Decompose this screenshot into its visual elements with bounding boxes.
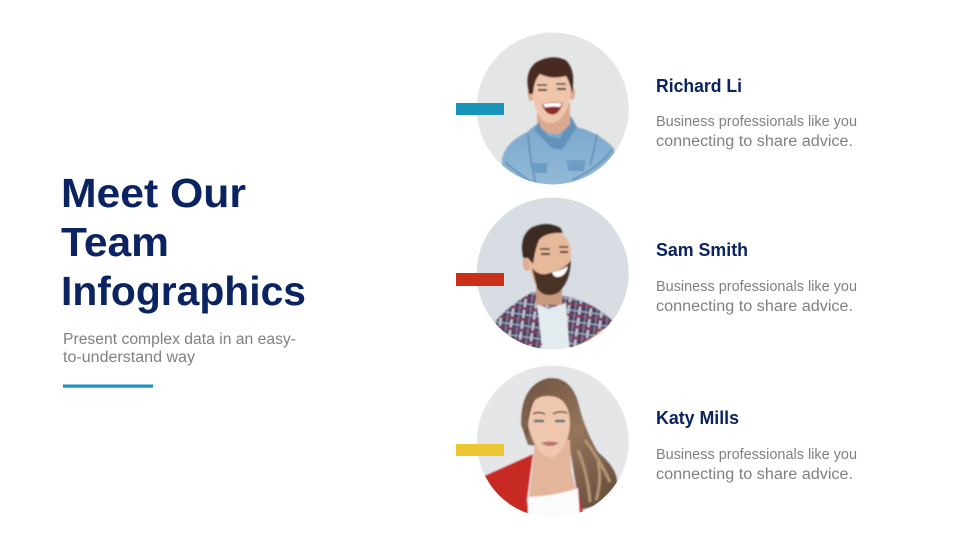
title: Meet Our <box>61 170 246 216</box>
description: Katy Mills: Business professionals like you <box>656 446 857 463</box>
accent bar: blue <box>456 103 504 115</box>
accent bar: yellow <box>456 444 504 456</box>
description: Richard Li: connecting to share advice. <box>656 133 853 150</box>
description: Sam Smith: Business professionals like you <box>656 278 857 295</box>
name: Richard Li: Richard Li <box>656 75 742 96</box>
accent bar: red <box>456 273 504 286</box>
description: Richard Li <box>656 113 857 150</box>
subtitle: Present complex data in an easy- <box>63 331 296 348</box>
portrait: Katy Mills <box>476 366 629 514</box>
title <box>61 170 306 314</box>
description: Katy Mills: connecting to share advice. <box>656 466 853 483</box>
portrait: Richard Li <box>477 32 629 184</box>
description: Sam Smith <box>656 278 857 315</box>
name: Sam Smith: Sam Smith <box>656 239 748 260</box>
title: Team <box>61 219 169 265</box>
portrait: Sam Smith <box>476 198 629 350</box>
subtitle: to-understand way <box>63 349 195 366</box>
name: Katy Mills: Katy Mills <box>656 407 739 428</box>
description: Richard Li: Business professionals like you <box>656 113 857 130</box>
title: Infographics <box>61 268 306 314</box>
description: Sam Smith: connecting to share advice. <box>656 298 853 315</box>
subtitle <box>63 331 296 366</box>
description: Katy Mills <box>656 446 857 483</box>
title underline <box>63 384 153 388</box>
